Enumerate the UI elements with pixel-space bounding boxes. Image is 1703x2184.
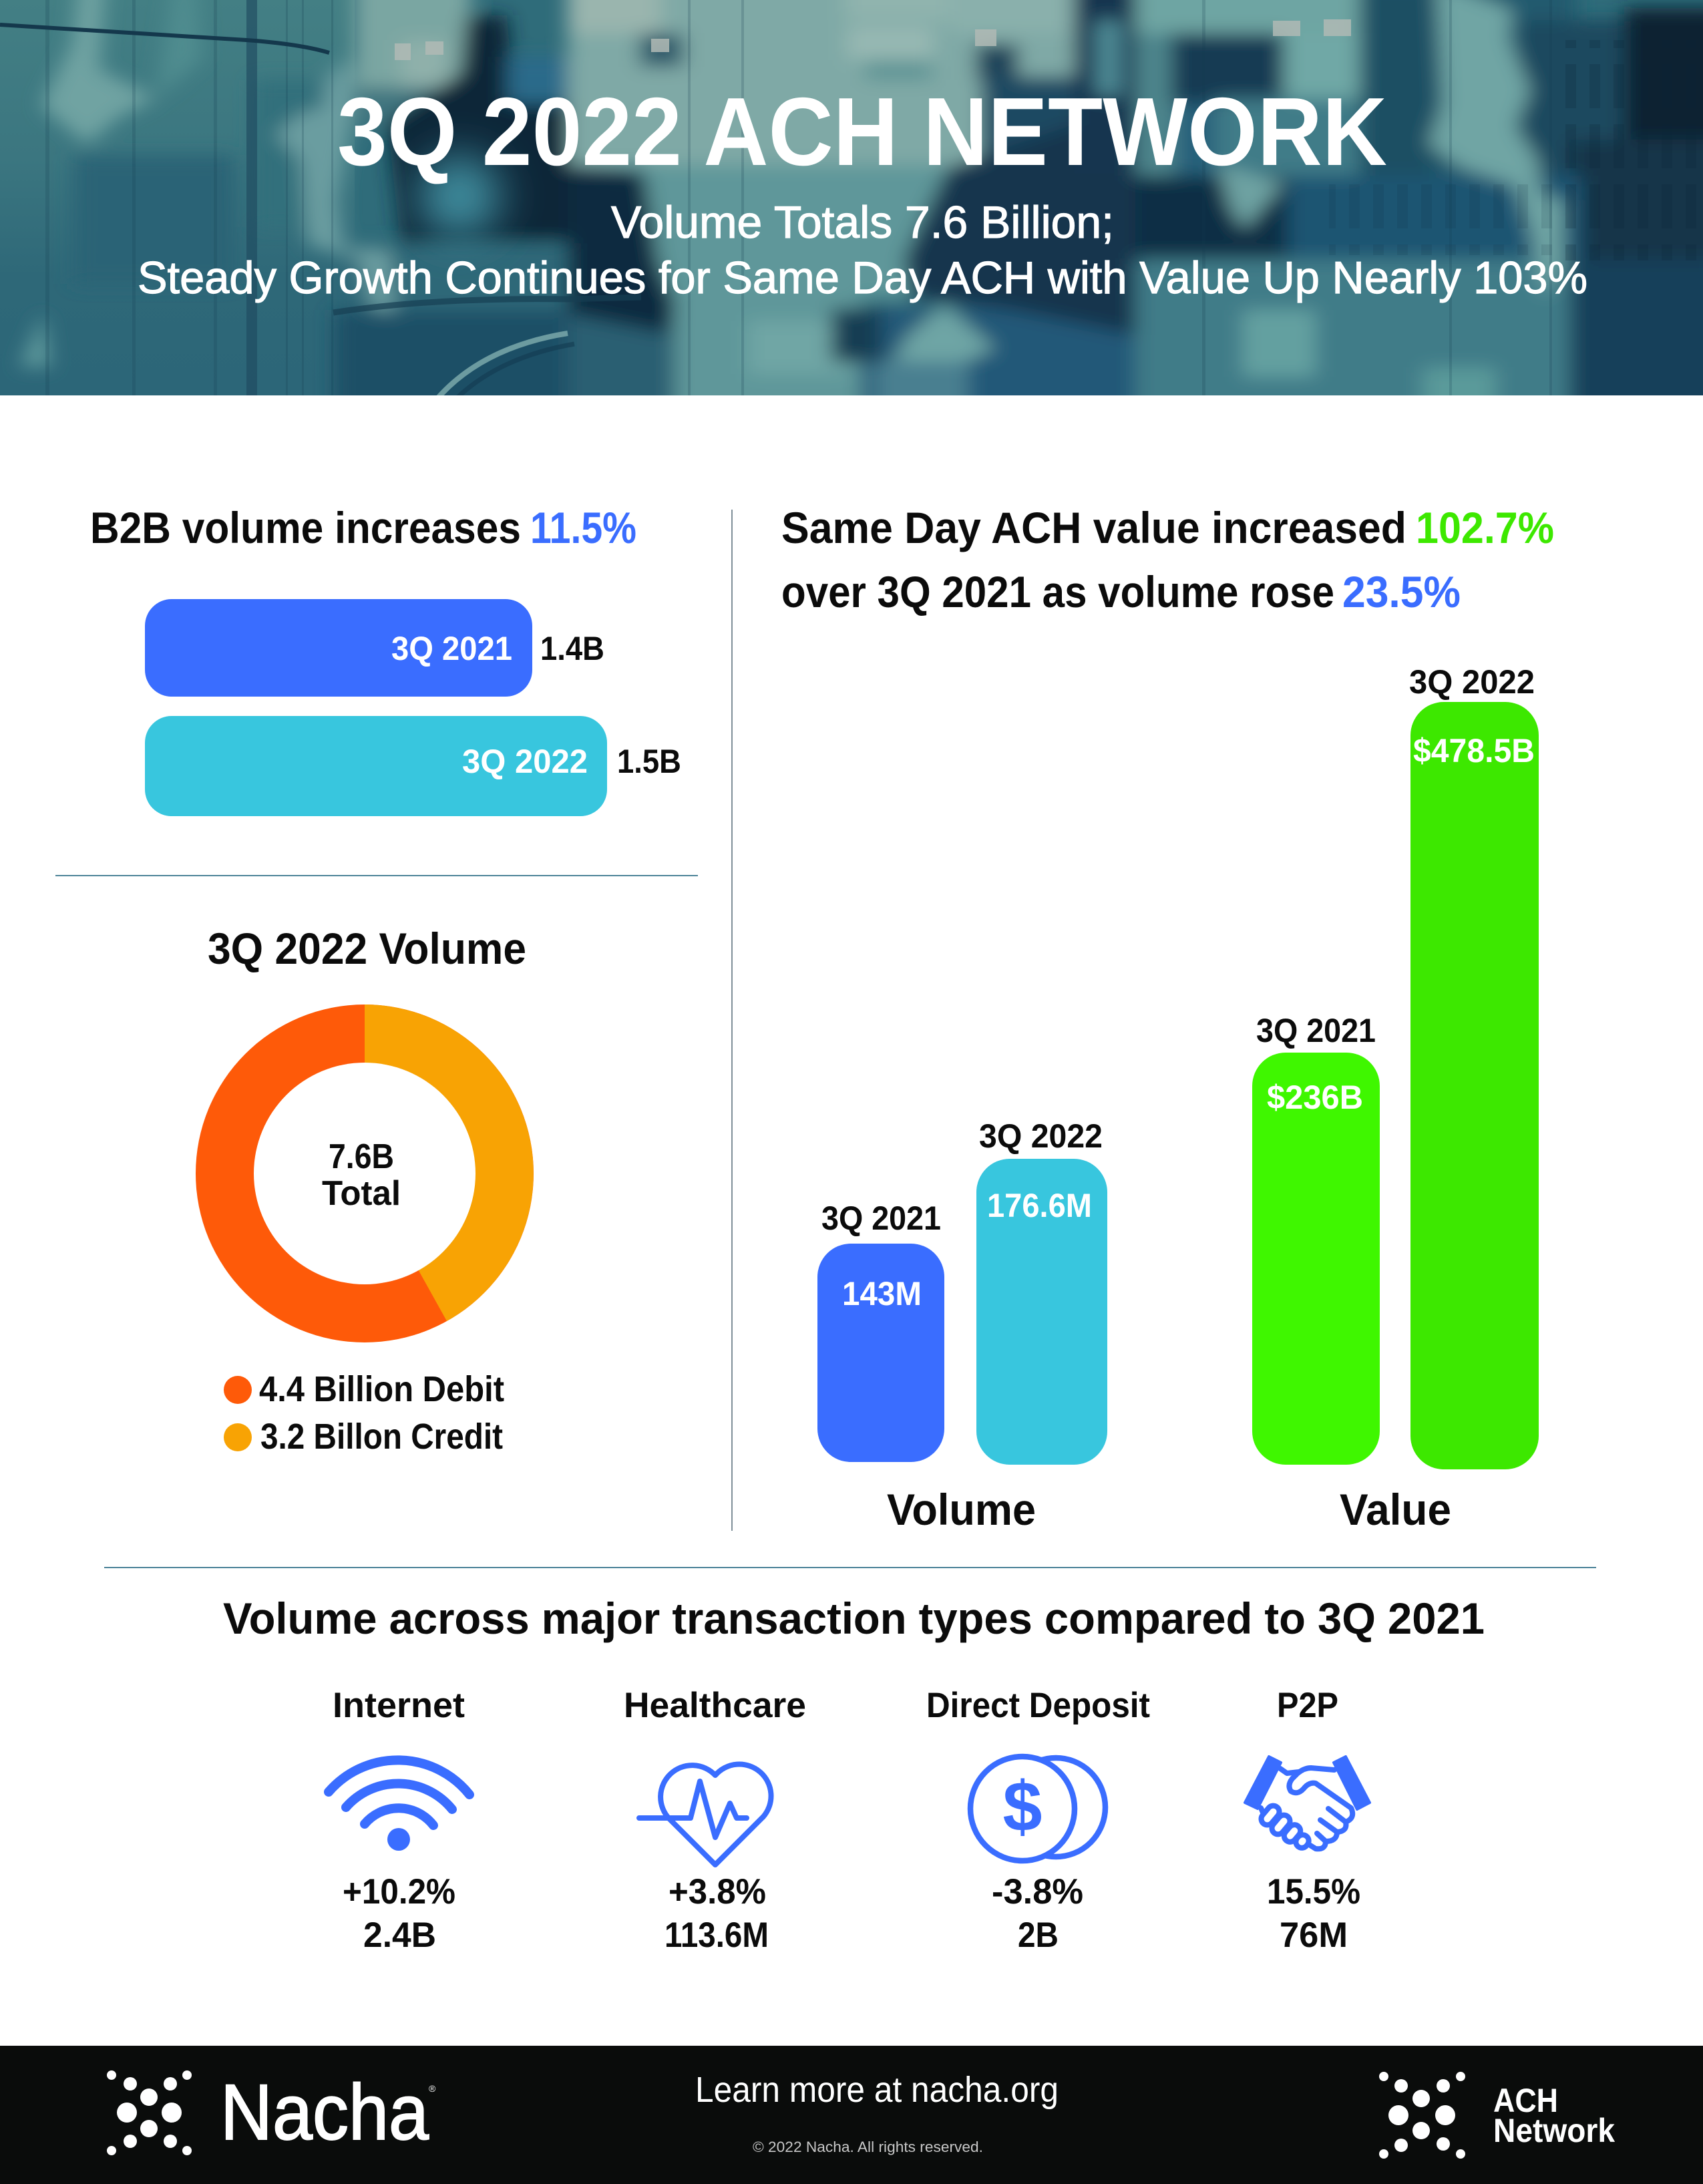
icon: coins — [970, 1757, 1105, 1861]
bar: volume 3Q 2021: 3Q 2021 — [821, 1200, 941, 1237]
heading: Same Day ACH value: 102.7% — [1416, 503, 1554, 552]
panel: Same Day ACH — [781, 503, 1554, 1534]
icon: heart with pulse — [639, 1764, 771, 1865]
bar: volume 3Q 2022: 3Q 2022 — [979, 1117, 1103, 1155]
bar: value 3Q 2022: $478.5B — [1413, 732, 1535, 769]
heading: 3Q 2022 Volume: 3Q 2022 Volume — [208, 924, 526, 973]
lower band left centre — [347, 243, 574, 317]
title: 3Q 2022 ACH NETWORK — [337, 77, 1387, 186]
panel: Healthcare: 113.6M — [665, 1916, 769, 1955]
learn more link text: Learn more at nacha.org — [695, 2070, 1059, 2110]
windows, lines and structural details — [1565, 40, 1600, 260]
bar: 3Q 2021 B2B: 3Q 2021 — [391, 630, 512, 667]
panel: P2P: P2P — [1277, 1686, 1338, 1725]
left light figure — [41, 0, 156, 144]
panel: P2P — [1245, 1686, 1370, 1955]
heading: B2B volume increases: 11.5% — [530, 503, 636, 552]
dark figure 1 — [387, 15, 568, 244]
donut chart — [196, 1005, 534, 1342]
bar: 3Q 2021 B2B: 1.4B — [540, 630, 604, 667]
bar: 3Q 2022 B2B: 3Q 2022 — [462, 743, 588, 780]
icon: coins: $ — [1003, 1767, 1042, 1846]
panel: Internet: +10.2% — [343, 1872, 455, 1912]
axis label: Volume: Volume — [887, 1485, 1036, 1534]
heading: Same Day ACH value — [781, 503, 1554, 616]
panel: Healthcare: Healthcare — [624, 1686, 806, 1725]
bar: volume 3Q 2022: 176.6M — [987, 1187, 1092, 1224]
bar: value 3Q 2021: $236B — [1267, 1079, 1363, 1116]
legend: 3.2 Billon Credit — [260, 1417, 503, 1457]
logo: Nacha: ® — [429, 2083, 436, 2094]
panel: Healthcare — [624, 1686, 806, 1955]
logo: Nacha: Nacha — [220, 2068, 429, 2157]
panel: P2P: 76M — [1280, 1916, 1348, 1955]
copyright: © 2022 Nacha. All rights reserved. — [753, 2139, 983, 2155]
light hand figure — [275, 57, 395, 313]
panel: Internet: Internet — [333, 1686, 465, 1725]
bar: 3Q 2022 B2B: 1.5B — [617, 743, 681, 780]
bar: value 3Q 2021 — [1252, 1012, 1380, 1465]
logo: Nacha — [107, 2068, 436, 2157]
bar: 3Q 2021 B2B — [145, 599, 604, 697]
bar: volume 3Q 2021: 143M — [842, 1275, 922, 1312]
subtitle: Steady Growth Continues for Same Day ACH with Value Up Nearly 103% — [138, 252, 1587, 303]
right section — [1135, 0, 1362, 33]
panel: Direct Deposit: -3.8% — [992, 1872, 1083, 1912]
heading: transaction types: Volume across major transaction types compared to 3Q 2021 — [223, 1594, 1485, 1643]
panel: Direct Deposit — [926, 1686, 1150, 1955]
legend: 4.4 Billion Debit — [259, 1369, 504, 1409]
bar: value 3Q 2022: 3Q 2022 — [1409, 663, 1535, 701]
centre mid — [641, 165, 948, 299]
bar: value 3Q 2022 — [1409, 663, 1539, 1469]
heading: Same Day ACH value: over 3Q 2021 as volume rose — [781, 567, 1334, 616]
heading: Same Day ACH value: 23.5% — [1342, 567, 1461, 616]
panel: 3Q 2022 volume donut — [196, 924, 534, 1457]
building top centre-left — [355, 0, 471, 87]
panel: Internet: 2.4B — [363, 1916, 436, 1955]
donut chart: Total — [322, 1174, 401, 1213]
heading: B2B volume increases: B2B volume increases — [90, 503, 521, 552]
icon: wifi — [329, 1760, 469, 1851]
icon: handshake — [1245, 1757, 1370, 1850]
panel: Direct Deposit: Direct Deposit — [926, 1686, 1150, 1725]
panel: B2B volume — [90, 503, 681, 816]
dark figure 2 — [568, 165, 675, 334]
bar: 3Q 2022 B2B — [145, 716, 681, 816]
subtitle — [138, 197, 1587, 303]
panel: Internet — [329, 1686, 469, 1955]
bar: volume 3Q 2021 — [817, 1200, 944, 1462]
centre top — [568, 0, 1075, 167]
footer — [0, 2046, 1703, 2184]
subtitle: Volume Totals 7.6 Billion; — [611, 197, 1114, 248]
donut chart: 7.6B — [329, 1137, 394, 1176]
axis label: Value: Value — [1340, 1485, 1451, 1534]
panel: Direct Deposit: 2B — [1018, 1916, 1059, 1955]
logo: ACH Network: ACH — [1493, 2082, 1558, 2119]
logo: ACH Network — [1379, 2072, 1615, 2159]
heading: Same Day ACH value: Same Day ACH value increased — [781, 503, 1406, 552]
panel: P2P: 15.5% — [1267, 1872, 1360, 1912]
bar: volume 3Q 2022 — [976, 1117, 1107, 1465]
legend — [224, 1369, 504, 1457]
header photo banner — [0, 0, 1703, 423]
bar: value 3Q 2021: 3Q 2021 — [1256, 1012, 1376, 1049]
logo: ACH Network: Network — [1493, 2112, 1615, 2149]
panel: Healthcare: +3.8% — [669, 1872, 766, 1912]
